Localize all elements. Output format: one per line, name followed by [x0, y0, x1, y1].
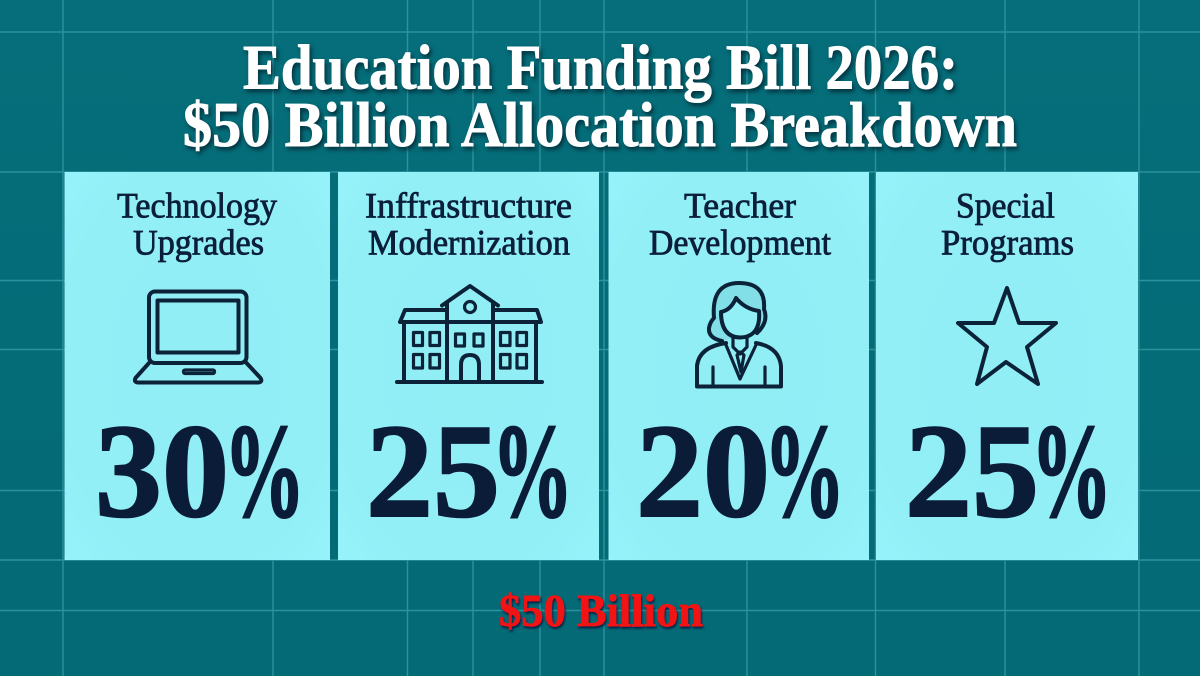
heading: technology upgrades: Upgrades — [133, 222, 264, 262]
percentage: 25%: 25 — [905, 397, 1039, 545]
icon: laptop — [135, 292, 261, 382]
percentage: 25% — [366, 397, 573, 545]
panel: teacher development — [608, 172, 869, 560]
heading: infrastructure modernization: Modernization — [368, 222, 570, 262]
percentage: 20% — [636, 397, 845, 545]
percentage: 25%: 25 — [366, 397, 500, 545]
panel: special programs — [876, 172, 1138, 560]
percentage: 25% — [905, 397, 1112, 545]
icon: teacher — [697, 283, 781, 386]
heading: technology upgrades: Technology — [117, 186, 277, 226]
title: Education Funding Bill 2026: — [243, 32, 958, 102]
percentage: 30%: 30 — [95, 397, 229, 545]
percentage: 30%: % — [224, 397, 305, 545]
title: $50 Billion Allocation Breakdown — [183, 90, 1017, 160]
heading: technology upgrades — [117, 186, 277, 262]
heading: infrastructure modernization: Inffrastructure — [365, 186, 572, 226]
heading: teacher development: Teacher — [684, 186, 796, 226]
icon: star — [958, 288, 1056, 384]
panel: infrastructure modernization — [338, 172, 599, 560]
title — [183, 32, 1017, 160]
percentage: 25%: % — [492, 397, 573, 545]
heading: special programs — [941, 186, 1074, 262]
heading: teacher development: Development — [649, 222, 831, 262]
heading: infrastructure modernization — [365, 186, 572, 262]
percentage: 20%: % — [764, 397, 845, 545]
percentage: 25%: % — [1031, 397, 1112, 545]
heading: special programs: Special — [956, 186, 1055, 226]
heading: special programs: Programs — [941, 222, 1074, 262]
percentage: 30% — [95, 397, 305, 545]
percentage: 20%: 20 — [636, 397, 770, 545]
panel: technology upgrades — [64, 172, 330, 560]
heading: teacher development — [649, 186, 831, 262]
icon: school building — [397, 286, 542, 382]
total amount: $50 Billion — [499, 585, 703, 636]
